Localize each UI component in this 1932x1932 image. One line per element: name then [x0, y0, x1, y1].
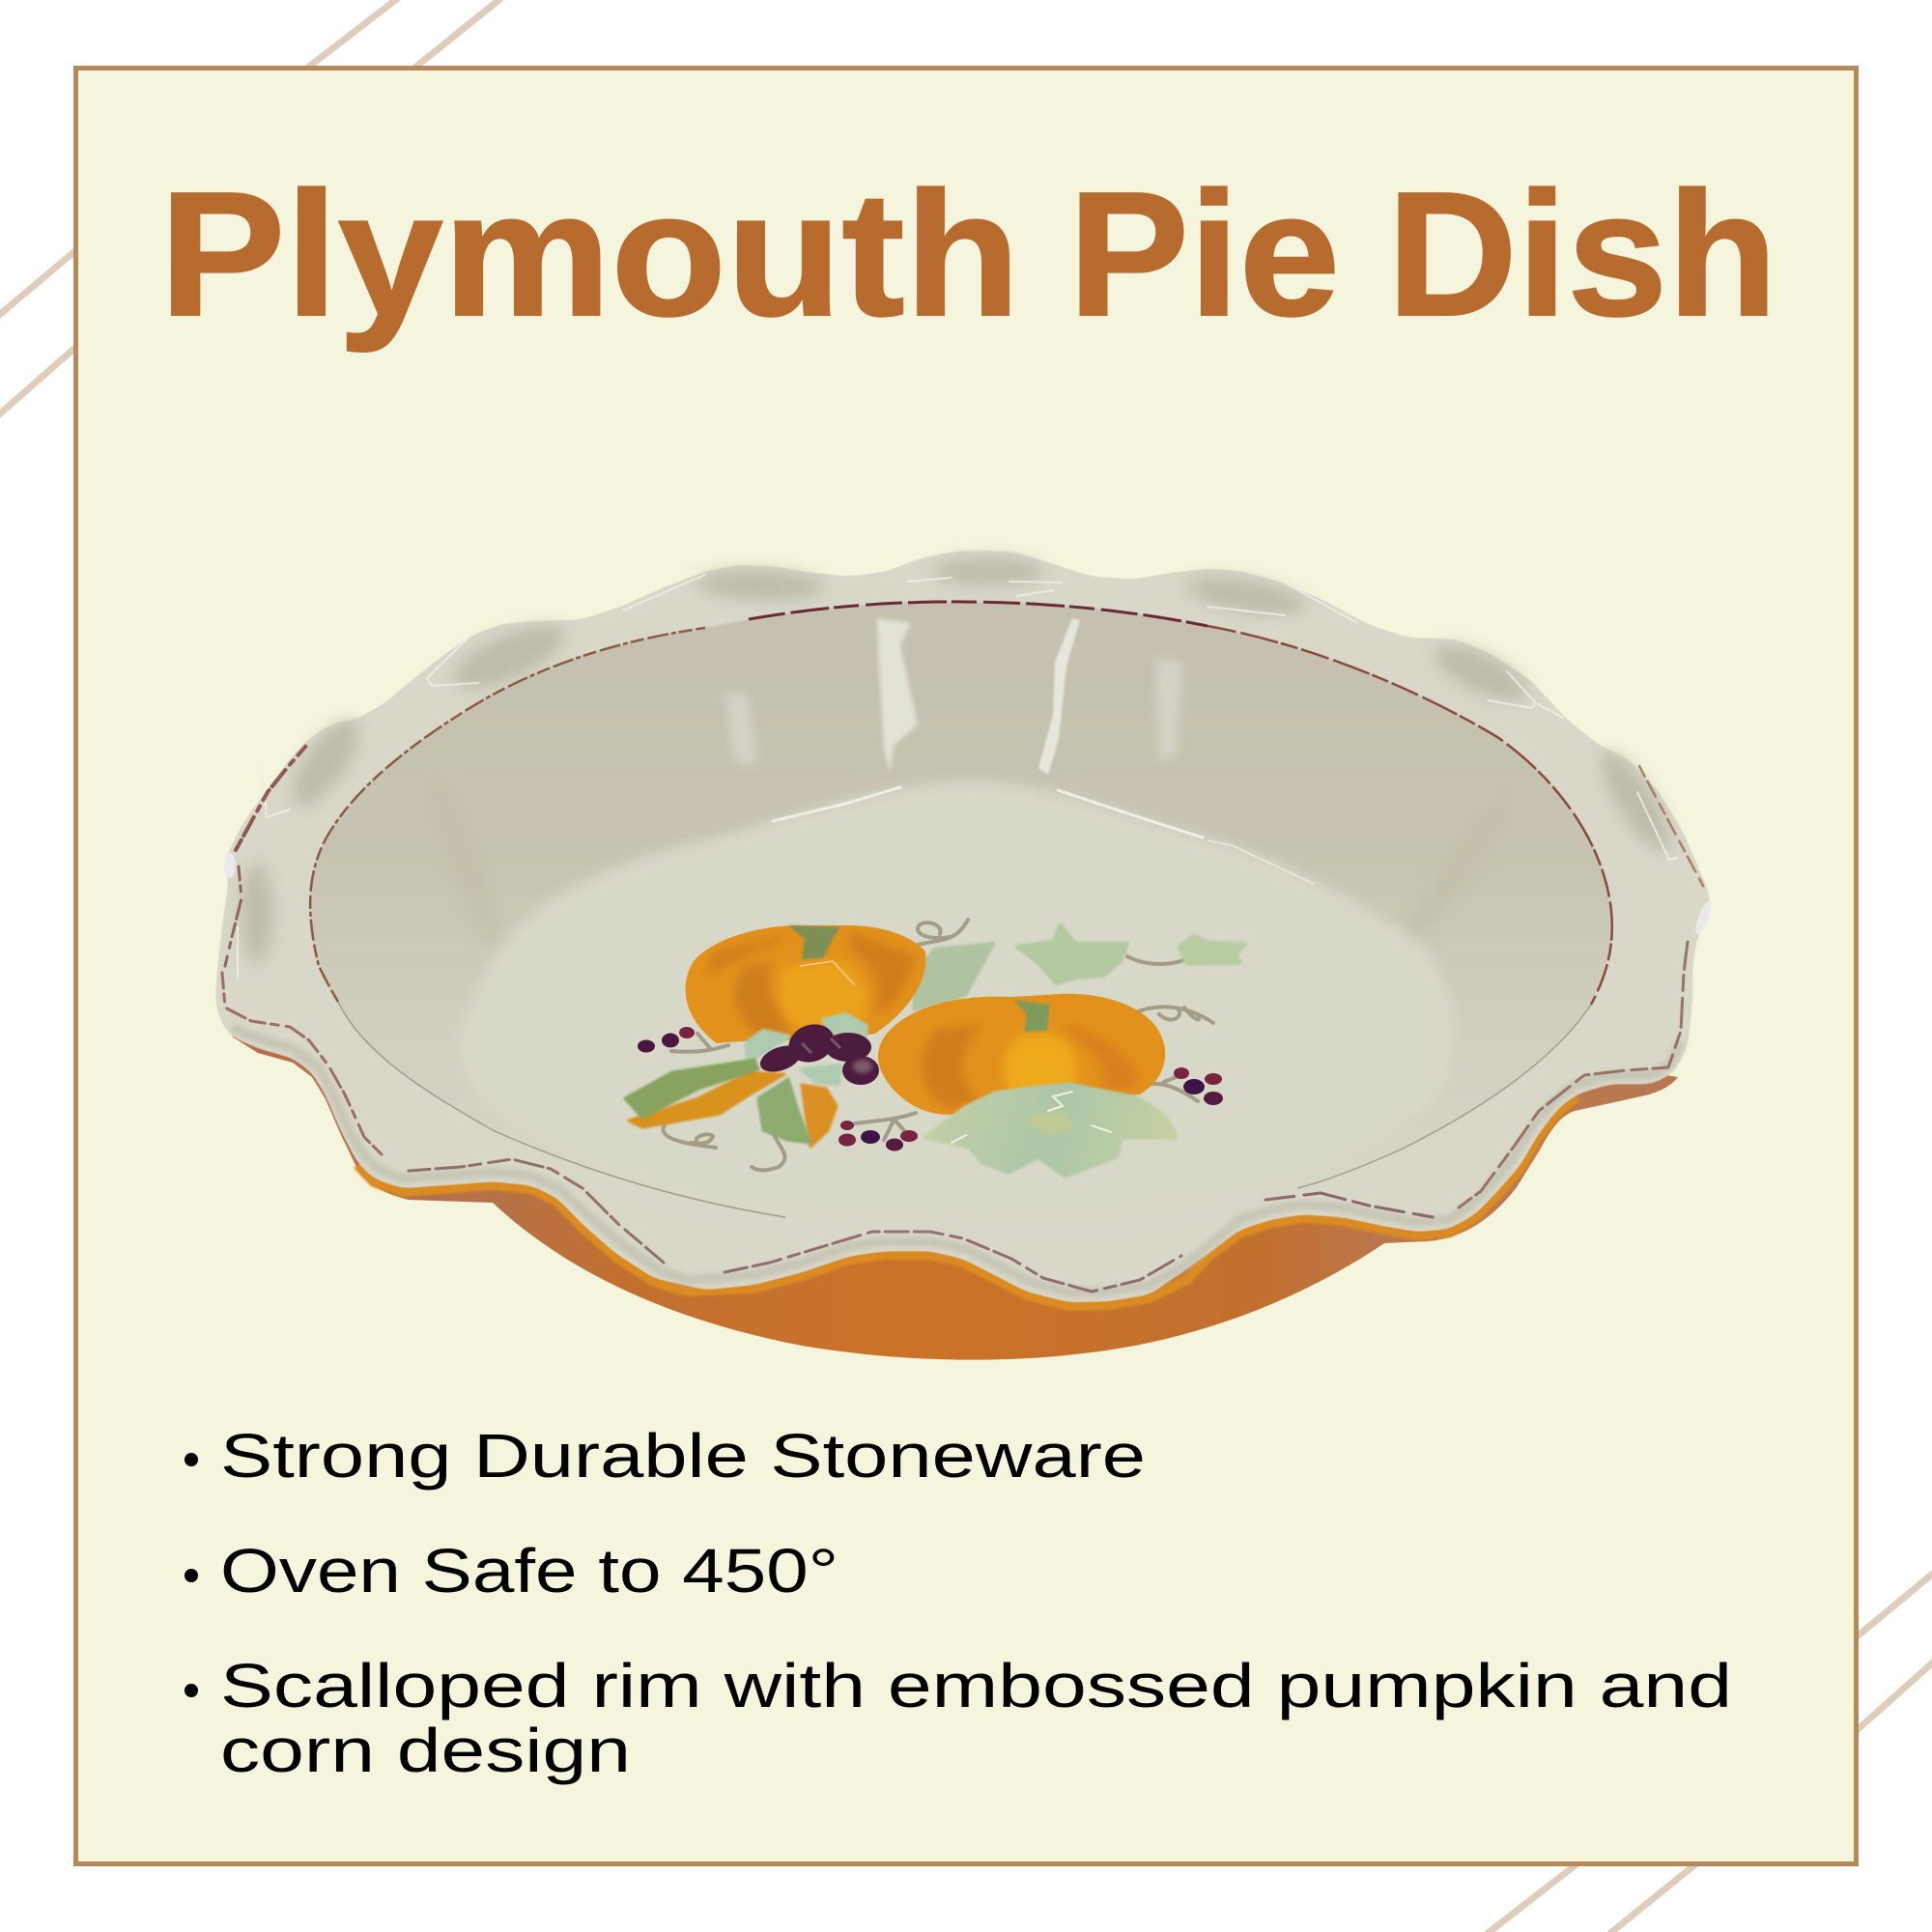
upper right leaves	[1017, 925, 1127, 983]
leaf centre	[1024, 1111, 1074, 1135]
vine tendrils	[664, 920, 1213, 1170]
orange glaze strip under rim	[357, 1097, 1577, 1306]
rim glaze highlights	[238, 575, 1677, 978]
soft folds in wall	[421, 774, 1520, 949]
bullet 3: Scalloped rim with embossed pumpkin and	[220, 1651, 1732, 1720]
orange corn leaf	[629, 1072, 784, 1127]
pie dish photo illustration	[215, 551, 1714, 1360]
bullet 3: corn design	[220, 1716, 631, 1785]
bullet 1: Strong Durable Stoneware	[220, 1421, 1146, 1491]
dish orange underside	[232, 966, 1678, 1360]
inner well walls	[310, 602, 1612, 1226]
green corn leaf	[625, 1060, 758, 1118]
pale leaf behind pumpkin	[914, 944, 993, 1009]
pumpkin right	[878, 994, 1165, 1115]
orange corn right	[802, 1085, 837, 1147]
title	[159, 155, 1777, 353]
well floor	[459, 781, 1454, 1222]
bullet 3	[185, 1651, 1732, 1785]
title: Pie	[1068, 155, 1340, 353]
stem left	[788, 925, 840, 959]
pumpkin left	[686, 925, 925, 1043]
outer brown rim edge	[222, 746, 1703, 1292]
title: Dish	[1387, 155, 1777, 353]
wall highlights	[724, 618, 1314, 884]
white glaze bumps at sides	[224, 853, 1714, 936]
husks	[746, 1014, 867, 1084]
stem right	[1013, 1000, 1050, 1032]
berries	[638, 1027, 1223, 1151]
leaf highlights	[952, 1092, 1111, 1143]
green leaf lower	[758, 1079, 810, 1143]
inner brown rim line	[310, 602, 1612, 1217]
rim dimples	[242, 558, 1681, 963]
purple corn	[756, 1018, 879, 1085]
bullet 2: Oven Safe to 450°	[220, 1536, 838, 1605]
scalloped stoneware rim	[215, 551, 1710, 1302]
embossed decoration	[625, 920, 1246, 1176]
rim lip band	[232, 1028, 1681, 1293]
bullet list	[185, 1421, 1732, 1785]
title: Plymouth	[159, 155, 1020, 353]
big pale leaf	[926, 1085, 1177, 1176]
